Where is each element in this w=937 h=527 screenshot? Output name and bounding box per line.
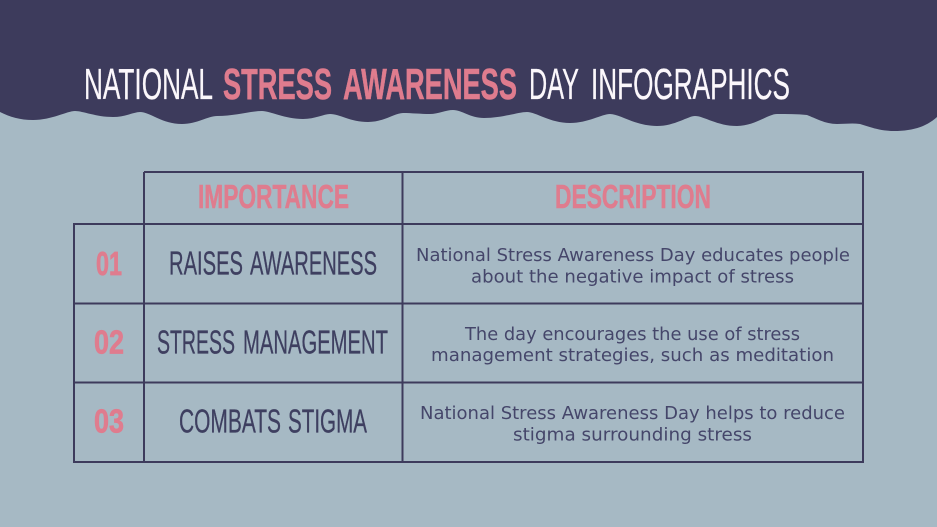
label: stress management: MANAGEMENT (243, 324, 388, 360)
title: STRESS (223, 61, 332, 109)
description 02: management strategies, such as meditation (431, 346, 834, 366)
description 02 (431, 325, 834, 366)
table grid (74, 172, 863, 462)
number 01: 01 (96, 245, 122, 282)
label: combats stigma: COMBATS (179, 402, 281, 440)
description 01 (416, 246, 850, 288)
title: INFOGRAPHICS (591, 61, 790, 109)
column heading: importance: IMPORTANCE (198, 178, 349, 215)
description 03 (420, 404, 845, 446)
description 03: stigma surrounding stress (513, 426, 752, 446)
label: raises awareness: AWARENESS (250, 244, 377, 282)
title (84, 61, 790, 109)
description 02: The day encourages the use of stress (464, 325, 800, 345)
title: AWARENESS (343, 61, 517, 109)
label: stress management: STRESS (157, 324, 235, 360)
description 01: National Stress Awareness Day educates people (416, 246, 850, 266)
label: combats stigma: STIGMA (288, 402, 367, 440)
row 03 (94, 402, 845, 446)
title: NATIONAL (84, 61, 213, 109)
number 02: 02 (94, 324, 124, 360)
row 02 (94, 324, 834, 366)
description 03: National Stress Awareness Day helps to reduce (420, 404, 845, 424)
header wavy banner (0, 0, 937, 131)
row 01 (96, 244, 850, 288)
title: DAY (529, 61, 579, 109)
label: raises awareness: RAISES (169, 244, 243, 282)
column heading: description: DESCRIPTION (555, 178, 711, 215)
label: stress management (157, 324, 388, 360)
label: raises awareness (169, 244, 377, 282)
description 01: about the negative impact of stress (471, 268, 794, 288)
number 03: 03 (94, 402, 124, 440)
